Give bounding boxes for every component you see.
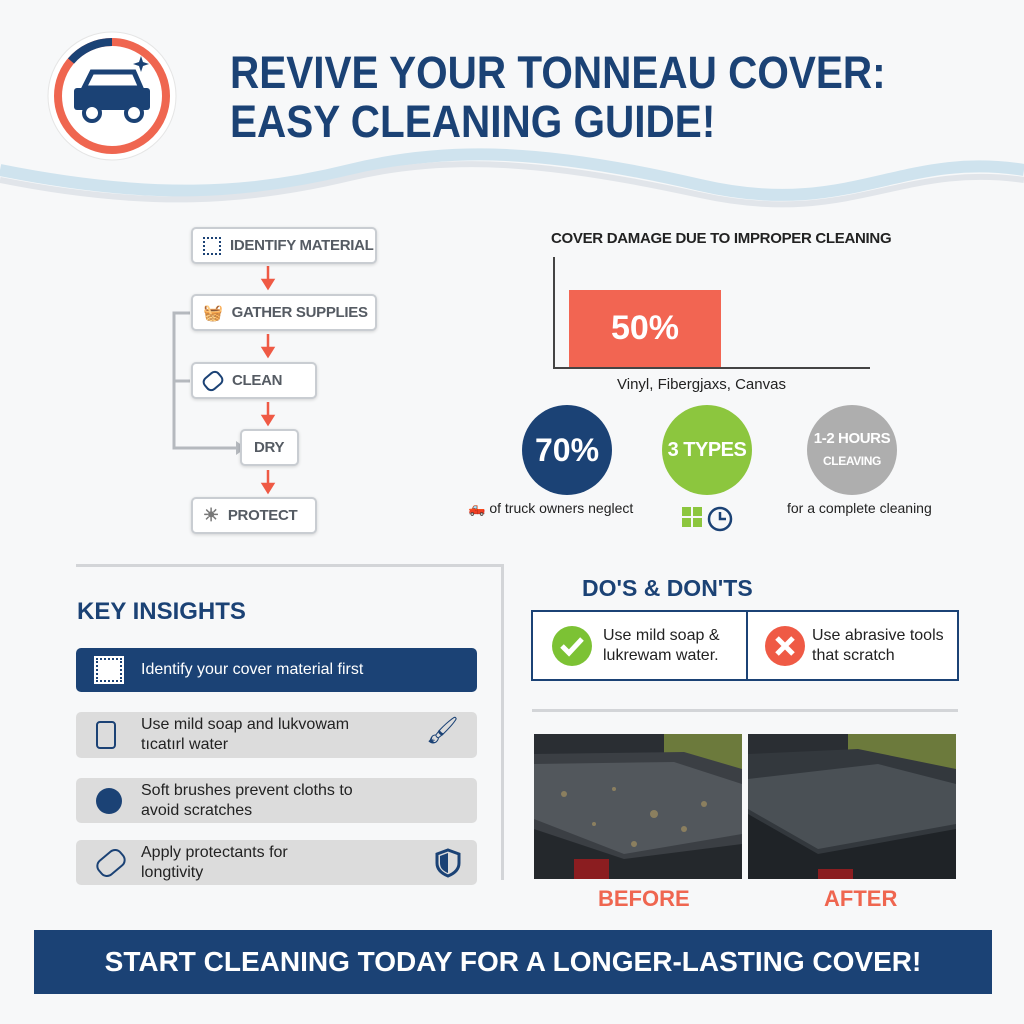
stat: 1-2 hours: CLEAVING: [823, 454, 881, 468]
step: dry: DRY: [254, 439, 284, 456]
chart: cover damage: [551, 230, 891, 393]
stat: 3 types: 3 TYPES: [668, 438, 746, 460]
stat: 70%: 70%: [535, 432, 599, 468]
step: clean: CLEAN: [232, 372, 282, 389]
title: [230, 47, 886, 147]
step: gather supplies: GATHER SUPPLIES: [232, 304, 368, 321]
label: after: AFTER: [824, 886, 897, 911]
do: [552, 626, 720, 666]
footer banner: [34, 930, 992, 994]
dont: that scratch: [812, 647, 895, 664]
stat: 70%: 🛻 of truck owners neglect: [468, 500, 633, 516]
dont: [765, 626, 944, 666]
photo: after: [748, 734, 956, 879]
do: lukrewam water.: [603, 647, 719, 664]
chart: cover damage: 50%: [611, 309, 679, 347]
photo: before: [534, 734, 742, 879]
dont: Use abrasive tools: [812, 627, 944, 644]
footer banner: START CLEANING TODAY FOR A LONGER-LASTING COVER!: [105, 946, 921, 977]
panel: key insights: [76, 564, 504, 880]
insight 4: [76, 840, 477, 885]
insight 3: avoid scratches: [141, 802, 252, 818]
insight 3: [76, 778, 477, 823]
title: EASY CLEANING GUIDE!: [230, 96, 715, 147]
insight 1: [76, 648, 477, 692]
stat: 1-2 hours: 1-2 HOURS: [814, 430, 890, 447]
insight 1: Identify your cover material first: [141, 661, 363, 678]
panel: dos and donts: [531, 610, 959, 681]
step: identify material: [191, 227, 377, 264]
insight 3: Soft brushes prevent cloths to: [141, 782, 353, 798]
stat: 1-2 hours: [787, 405, 932, 516]
chart: cover damage: Vinyl, Fibergjaxs, Canvas: [617, 376, 786, 393]
do: Use mild soap &: [603, 627, 720, 644]
flowchart: [172, 266, 276, 494]
stat: 1-2 hours: for a complete cleaning: [787, 500, 932, 516]
insight 2: [76, 712, 477, 758]
insight 2: Use mild soap and lukvowam: [141, 716, 349, 733]
step: gather supplies: 🧺: [203, 304, 223, 322]
insight 4: longtivity: [141, 864, 203, 880]
step: gather supplies: [191, 294, 377, 331]
heading: dos and donts: DO'S & DON'TS: [582, 575, 753, 601]
step: identify material: IDENTIFY MATERIAL: [230, 237, 374, 254]
logo: [48, 32, 176, 160]
label: before: BEFORE: [598, 886, 690, 911]
insight 4: Apply protectants for: [141, 844, 288, 860]
chart: cover damage: COVER DAMAGE DUE TO IMPROPER CLEANING: [551, 230, 891, 247]
step: dry: [240, 429, 299, 466]
step: protect: PROTECT: [228, 507, 297, 524]
heading: key insights: KEY INSIGHTS: [77, 598, 246, 625]
title: REVIVE YOUR TONNEAU COVER:: [230, 47, 886, 98]
step: clean: [191, 362, 317, 399]
wave decoration: [0, 148, 1024, 208]
step: protect: ☀: [203, 505, 219, 525]
insight 2: 🖌: [426, 715, 459, 745]
stat: 3 types: [662, 405, 752, 532]
stat: 70%: [468, 405, 634, 516]
insight 2: tıcatırl water: [141, 736, 228, 753]
step: protect: [191, 497, 317, 534]
